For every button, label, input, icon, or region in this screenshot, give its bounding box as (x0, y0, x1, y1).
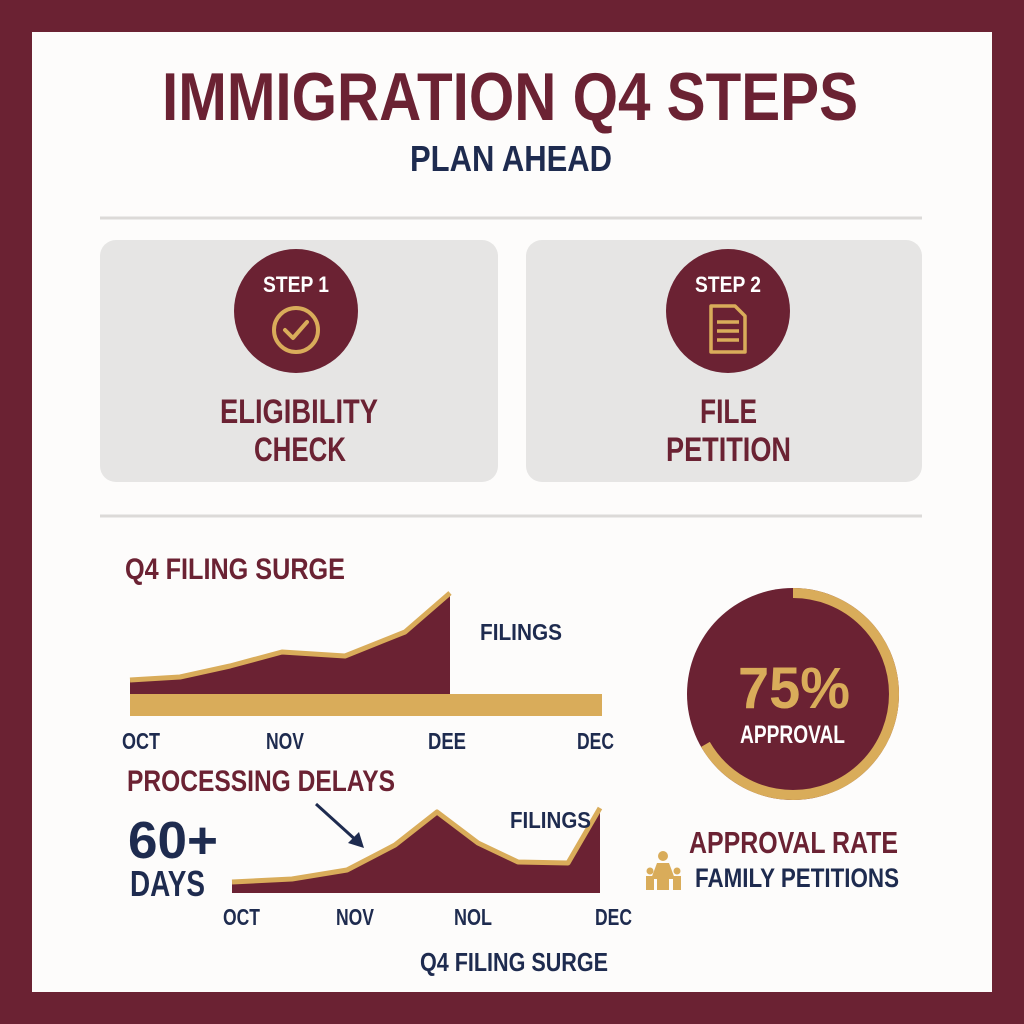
chart: filings area 2: OCT (223, 904, 260, 930)
stat: 60+ days: DAYS (130, 863, 205, 904)
caption: Q4 filing surge: Q4 FILING SURGE (420, 947, 608, 977)
panel: step 2: FILE (700, 393, 757, 431)
panel: step 2 (526, 240, 922, 482)
chart: filings area 1: DEC (577, 728, 614, 754)
chart: filings area 2: NOV (336, 904, 375, 930)
panel: step 2: STEP 2 (695, 272, 761, 297)
arrow (316, 804, 364, 848)
heading: processing delays: PROCESSING DELAYS (127, 765, 395, 798)
chart: filings area 1: NOV (266, 728, 305, 754)
panel: step 1: ELIGIBILITY (220, 393, 378, 431)
panel: step 1 (100, 240, 498, 482)
chart: filings area 2: NOL (454, 904, 492, 930)
panel: step 2: PETITION (666, 431, 791, 469)
panel: step 1: STEP 1 (263, 272, 329, 297)
chart: filings area 1 (122, 593, 614, 754)
heading: Q4 filing surge: Q4 FILING SURGE (125, 553, 345, 586)
label: approval rate (689, 825, 899, 893)
chart: filings area 1: OCT (122, 728, 160, 754)
stat: 60+ days (128, 812, 218, 904)
chart: filings area 2 (223, 807, 632, 930)
donut: 75% approval (687, 588, 899, 800)
label: approval rate: FAMILY PETITIONS (695, 863, 899, 893)
chart: filings area 2: FILINGS (510, 807, 591, 833)
icon: check (274, 308, 318, 352)
chart: filings area 2: DEC (595, 904, 632, 930)
icon: family (646, 851, 681, 890)
icon: document (711, 306, 745, 352)
title: IMMIGRATION Q4 STEPS (162, 59, 858, 135)
label: approval rate: APPROVAL RATE (689, 825, 898, 860)
chart: filings area 1: DEE (428, 728, 466, 754)
stat: 60+ days: 60+ (128, 812, 218, 870)
panel: step 1: CHECK (254, 431, 346, 469)
chart: filings area 1: FILINGS (480, 619, 562, 645)
subtitle: PLAN AHEAD (410, 138, 612, 179)
donut: 75% approval: APPROVAL (740, 721, 845, 749)
donut: 75% approval: 75% (738, 656, 850, 721)
